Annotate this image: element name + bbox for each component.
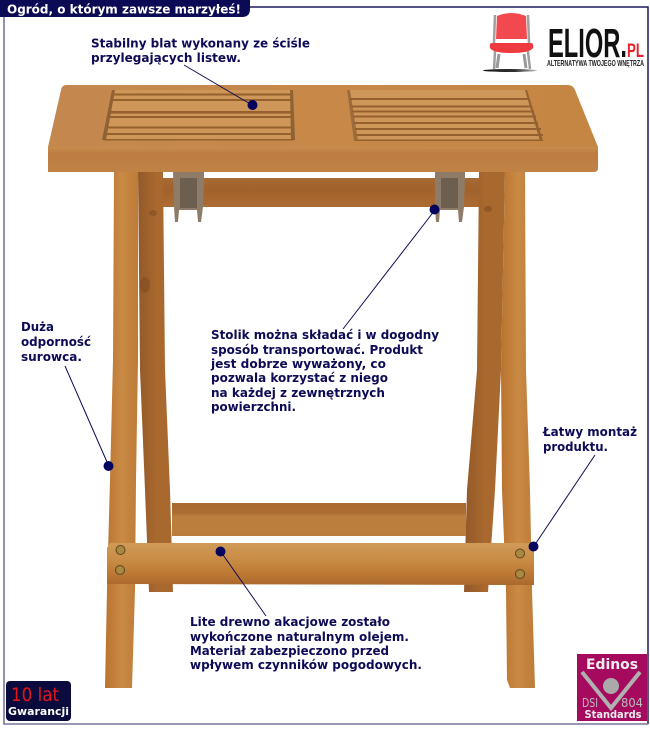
left bracket bbox=[173, 172, 204, 222]
callout: folding: powierzchni. bbox=[211, 400, 296, 414]
callout: folding: Stolik można składać i w dogodny bbox=[211, 328, 439, 342]
callout: material resistance bbox=[21, 320, 114, 471]
callout: folding: jest dobrze wyważony, co bbox=[210, 357, 386, 371]
left slat inset bbox=[102, 90, 295, 140]
callout: acacia wood: Lite drewno akacjowe zostało bbox=[190, 615, 390, 629]
callout: acacia wood bbox=[190, 546, 422, 672]
knots bbox=[140, 206, 492, 293]
callout: folding: pozwala korzystać z niego bbox=[211, 371, 388, 385]
front left leg bbox=[105, 172, 138, 688]
badge: Edinos standards: Standards bbox=[584, 708, 642, 721]
right bracket bbox=[435, 172, 465, 222]
badge: Edinos standards: 804 bbox=[621, 696, 643, 710]
folding table illustration bbox=[48, 85, 598, 688]
callout: folding bbox=[210, 204, 440, 414]
badge: 10 years warranty: Gwarancji bbox=[8, 705, 69, 718]
inner right leg bbox=[464, 172, 505, 592]
screws bbox=[116, 546, 524, 578]
callout: acacia wood: wpływem czynników pogodowych. bbox=[190, 658, 422, 672]
callout: easy assembly: produktu. bbox=[543, 440, 608, 454]
front cross bar bbox=[107, 543, 534, 585]
callout: material resistance: Duża bbox=[21, 320, 54, 334]
logo: Elior bbox=[483, 13, 644, 72]
table top front edge bbox=[48, 147, 598, 172]
callout: acacia wood: wykończone naturalnym olejem. bbox=[190, 630, 409, 644]
upper cross bar bbox=[163, 178, 479, 207]
inner left leg bbox=[138, 172, 173, 592]
badge: 10 years warranty: 10 lat bbox=[11, 684, 59, 706]
badge: Edinos standards: DSI bbox=[582, 696, 598, 710]
table top surface bbox=[48, 85, 598, 147]
callout: material resistance: odporność bbox=[21, 335, 91, 349]
callout: easy assembly bbox=[528, 425, 637, 552]
front right leg bbox=[501, 172, 535, 688]
callout: folding: na każdej z zewnętrznych bbox=[211, 386, 385, 400]
callout: folding: sposób transportować. Produkt bbox=[211, 343, 423, 357]
right slat inset bbox=[347, 90, 543, 141]
callout: table top: przylegających listew. bbox=[91, 51, 241, 65]
badge: 10 years warranty bbox=[6, 681, 71, 721]
lower back bar bbox=[172, 503, 466, 536]
callout: material resistance: surowca. bbox=[21, 350, 82, 364]
header banner: Ogród, o którym zawsze marzyłeś! bbox=[7, 2, 241, 16]
icon: red chair bbox=[483, 13, 537, 72]
callout: acacia wood: Materiał zabezpieczono przed bbox=[190, 644, 389, 658]
badge: Edinos standards bbox=[577, 654, 647, 721]
callout: table top bbox=[91, 36, 310, 110]
callout: table top: Stabilny blat wykonany ze ściśle bbox=[91, 36, 310, 50]
badge: Edinos standards: Edinos bbox=[586, 657, 638, 673]
callout: easy assembly: Łatwy montaż bbox=[542, 425, 637, 439]
